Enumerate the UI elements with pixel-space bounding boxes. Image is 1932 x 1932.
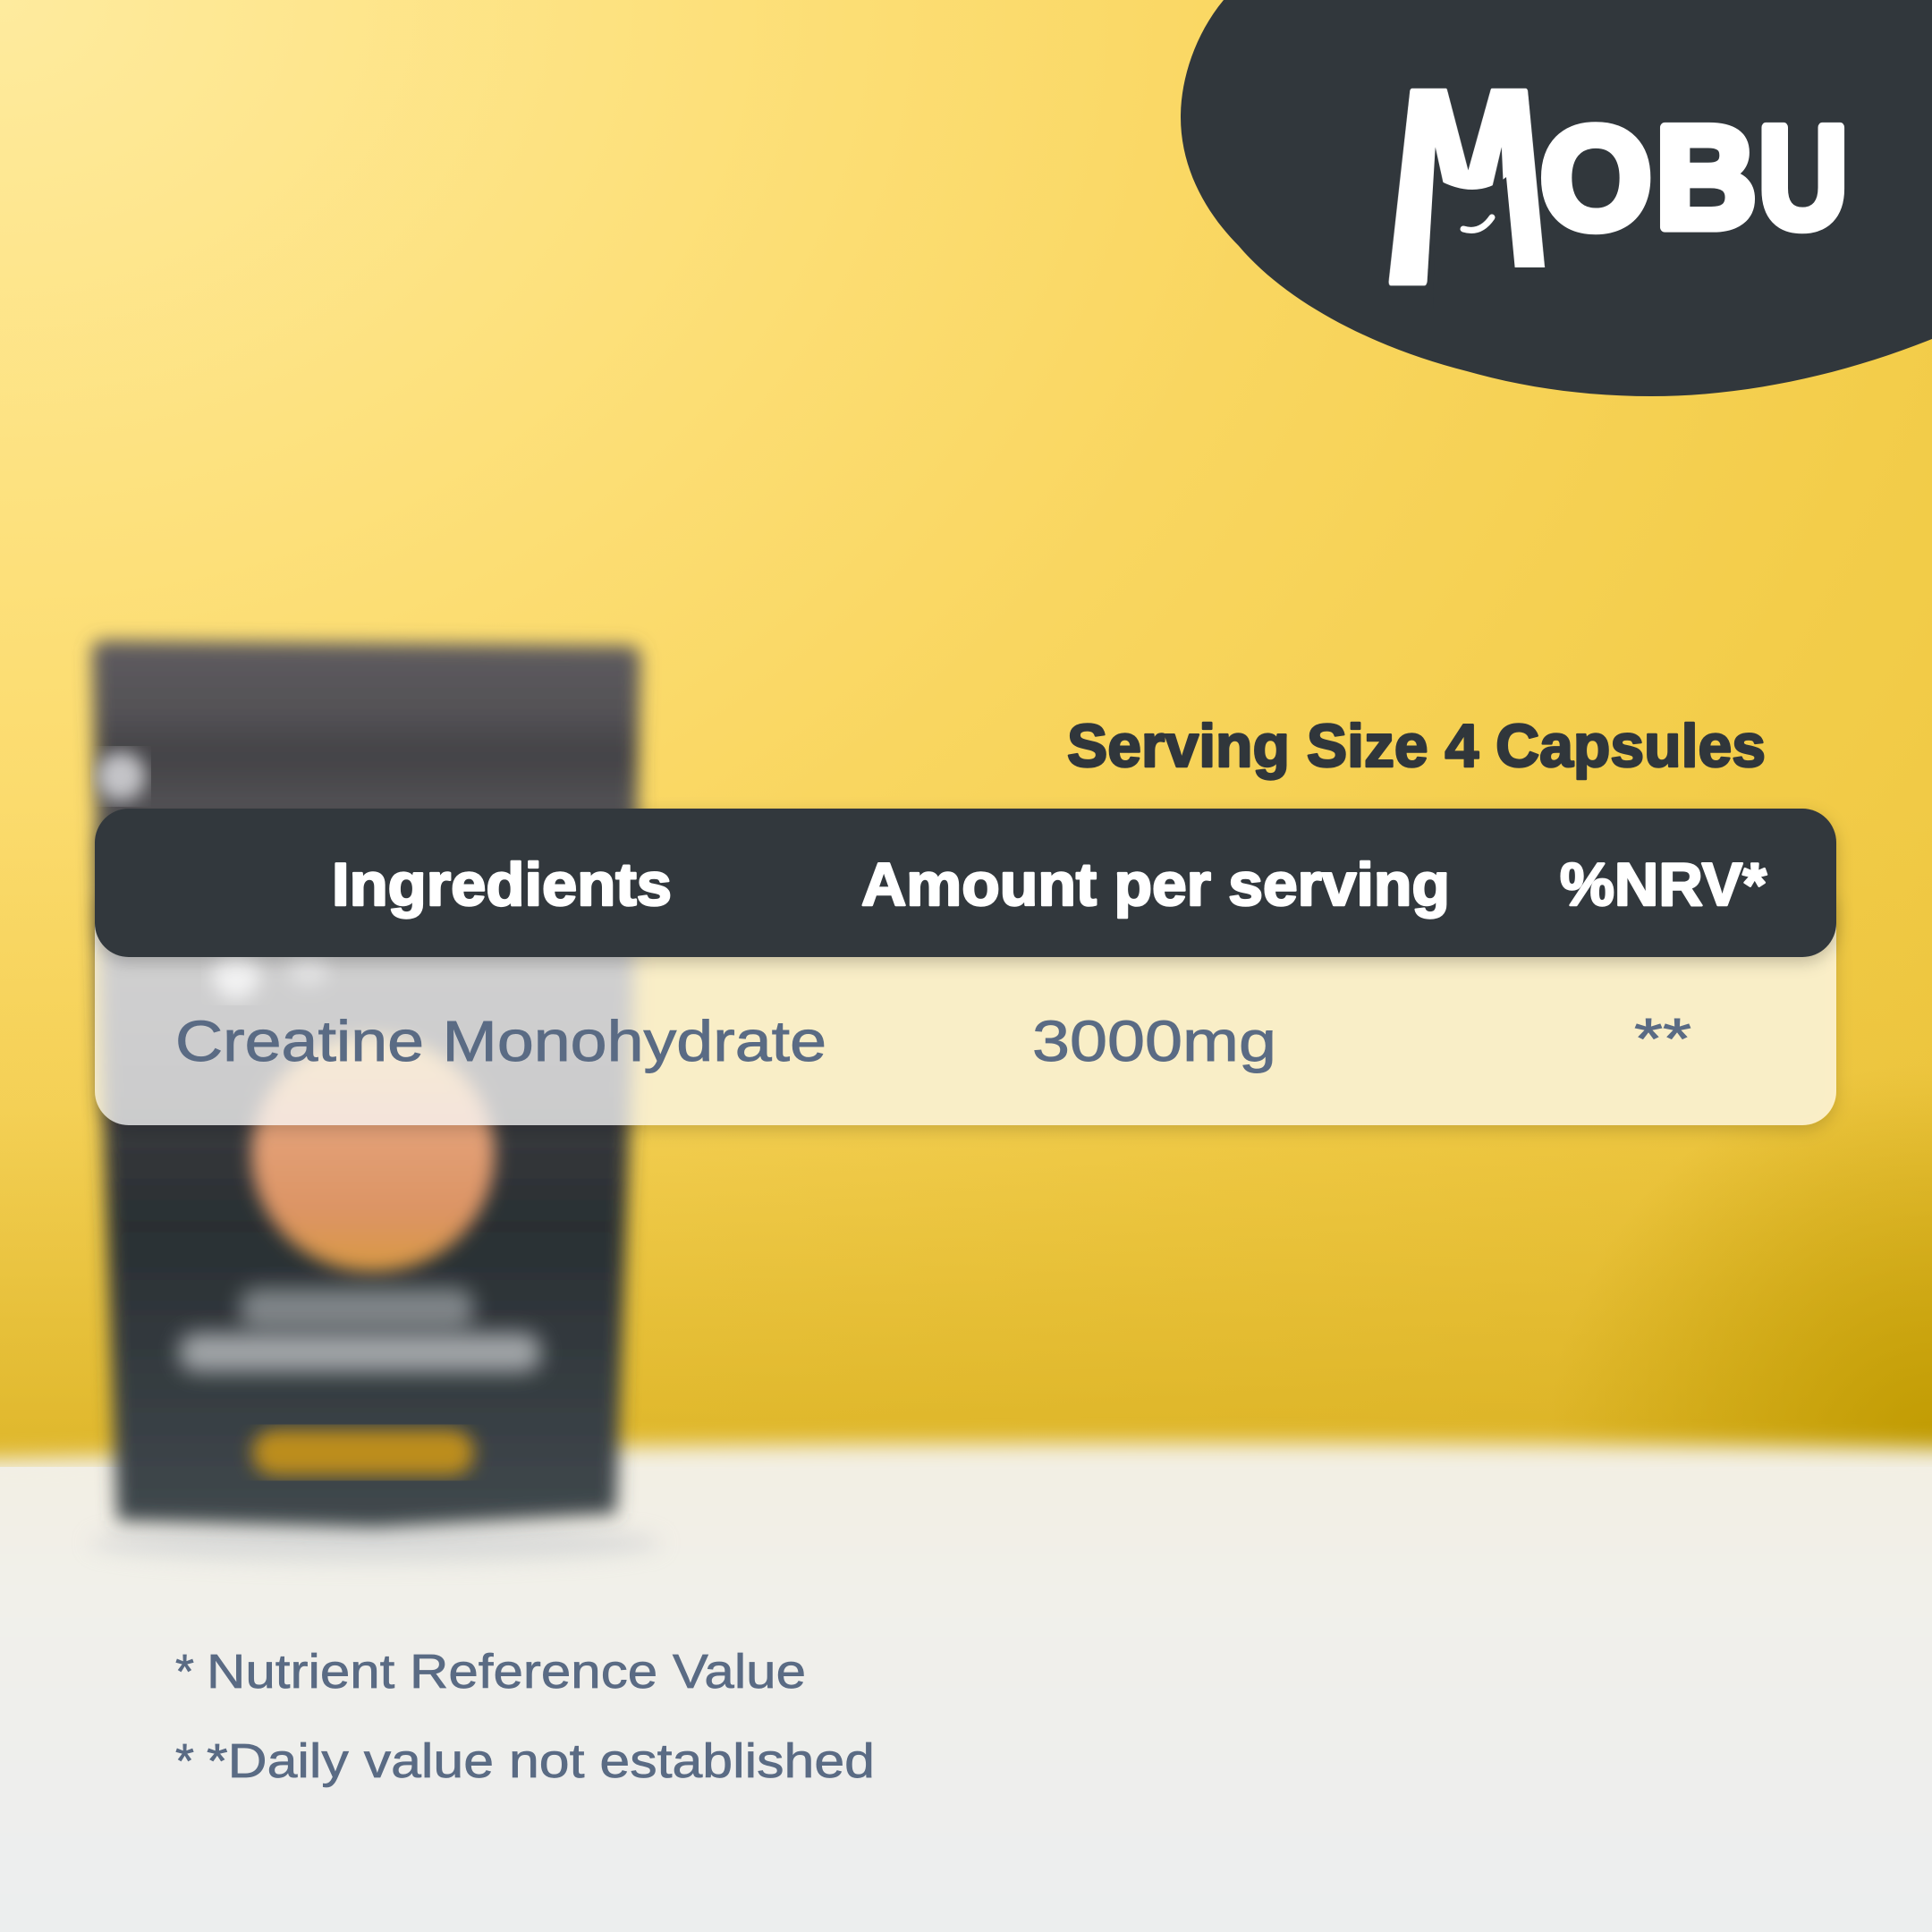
header: ingredients: Ingredients [332, 851, 672, 919]
pouch shadow [89, 1523, 662, 1563]
footnote two text: *Daily value not established [207, 1734, 875, 1788]
logo letters O B U [1540, 96, 1848, 259]
pouch small white dots [213, 950, 328, 1000]
table body row [95, 894, 1836, 1125]
footnote one text: Nutrient Reference Value [207, 1645, 806, 1699]
logo letters O B U: O [1540, 97, 1651, 259]
amount value: 3000mg [1032, 1009, 1276, 1073]
pouch egg graphic [251, 1036, 495, 1272]
logo blob [1181, 0, 1932, 396]
footnotes [175, 1645, 875, 1788]
header bar [95, 809, 1836, 957]
pouch title blur line one [240, 1288, 474, 1329]
serving size heading: Serving Size 4 Capsules [1067, 712, 1766, 780]
row translucent panel [95, 894, 1836, 1125]
blurred product pouch [89, 640, 662, 1563]
pouch title blur line two [179, 1333, 541, 1372]
ingredient name: Creatine Monohydrate [175, 1009, 826, 1073]
logo letters O B U: B [1656, 96, 1757, 258]
footnote asterisk one: * [175, 1645, 194, 1699]
pouch hang hole [96, 751, 146, 801]
table header [95, 809, 1836, 957]
footnote asterisk two: * [175, 1734, 194, 1788]
background: yellow wall [0, 0, 1932, 1467]
logo smile and M leg trim [1443, 177, 1546, 286]
header: amount per serving: Amount per serving [861, 851, 1450, 919]
pouch orange pill [252, 1429, 474, 1476]
pouch body [92, 640, 640, 1528]
background: white table [0, 1443, 1932, 1932]
nrv value: ** [1634, 1006, 1691, 1071]
logo letters O B U: U [1758, 97, 1848, 258]
header: nrv: %NRV* [1560, 851, 1767, 919]
